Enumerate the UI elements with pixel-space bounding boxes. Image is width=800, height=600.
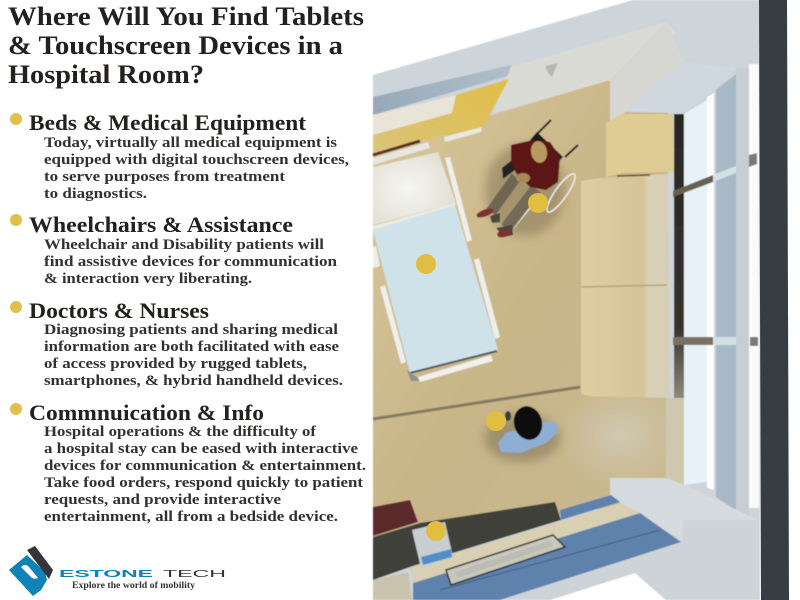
- body text: [44, 424, 366, 525]
- yellow wall panel: [373, 79, 509, 152]
- headboard wall strip: [373, 95, 457, 135]
- bullet: [10, 214, 22, 226]
- body text: [44, 237, 338, 287]
- window outer white: [749, 64, 759, 508]
- body text: a hospital stay can be eased with interactive: [44, 441, 358, 457]
- marker: nurse: [486, 411, 506, 431]
- window pale glass: [684, 100, 707, 485]
- window column: [736, 68, 749, 518]
- body text: to serve purposes from treatment: [44, 169, 285, 185]
- title: [8, 2, 364, 89]
- grey floor sheen near the window: [558, 385, 682, 485]
- body text: find assistive devices for communication: [44, 254, 338, 270]
- body text: [44, 322, 343, 389]
- body text: requests, and provide interactive: [44, 492, 281, 508]
- sofa: [581, 174, 670, 398]
- wordmark: TECH: [163, 569, 226, 580]
- body text: & interaction very liberating.: [44, 271, 252, 287]
- window soffit: [626, 62, 736, 113]
- wall below window frame: [666, 398, 684, 485]
- heading: Doctors & Nurses: [29, 298, 209, 323]
- section: doctors and nurses: [10, 298, 343, 389]
- heading: Beds & Medical Equipment: [29, 110, 307, 135]
- body text: smartphones, & hybrid handheld devices.: [44, 373, 343, 389]
- blue-grey wall stripe: [373, 65, 511, 115]
- tagline: Explore the world of mobility: [72, 581, 195, 591]
- body text: entertainment, all from a bedside device.: [44, 509, 338, 525]
- ceiling soffit: [493, 22, 676, 113]
- marker: wheelchair: [528, 193, 548, 213]
- dark structural column: [759, 0, 789, 600]
- panel: hospital room illustration: [373, 0, 789, 600]
- window blue glass: [716, 74, 736, 510]
- logo: Estone Tech: [9, 546, 226, 596]
- dark headboard edge: [373, 141, 420, 155]
- window white strip: [707, 93, 714, 490]
- dark desk: [373, 502, 561, 580]
- bullet: [10, 301, 22, 313]
- body text: Take food orders, respond quickly to patient: [44, 475, 363, 491]
- marker: bed: [416, 254, 436, 274]
- section: wheelchairs and assistance: [10, 212, 338, 287]
- body text: Diagnosing patients and sharing medical: [44, 322, 338, 338]
- soffit corner: [610, 22, 683, 122]
- wheelchair patient: [475, 120, 579, 239]
- floor: [373, 80, 668, 545]
- logo mark: [9, 546, 53, 596]
- body text: to diagnostics.: [44, 186, 147, 202]
- section: beds and medical equipment: [10, 110, 349, 202]
- body text: information are both facilitated with ease: [44, 339, 339, 355]
- grey cabinet: [373, 572, 412, 600]
- body text: equipped with digital touchscreen devices,: [44, 152, 349, 168]
- window sill: [610, 478, 758, 541]
- visitor chair: [373, 500, 418, 536]
- title: & Touchscreen Devices in a: [8, 31, 343, 60]
- wordmark: ESTONE: [59, 569, 154, 580]
- counter: [410, 503, 640, 583]
- bullet: [10, 403, 22, 415]
- heading: Wheelchairs & Assistance: [29, 212, 293, 237]
- tablet device on desk: [412, 522, 453, 568]
- ceiling light fixture: [545, 63, 558, 77]
- lower mullion: [673, 337, 713, 345]
- body text: Wheelchair and Disability patients will: [44, 237, 324, 253]
- upper mullion: [673, 175, 713, 197]
- wall base: [373, 0, 760, 600]
- body text: devices for communication & entertainment.: [44, 458, 366, 474]
- keyboard tray: [446, 535, 565, 585]
- blue floor at door: [560, 495, 620, 520]
- side table cube: [606, 114, 674, 177]
- body text: [44, 135, 349, 202]
- wordmark: [59, 569, 226, 580]
- bullet: [10, 113, 22, 125]
- heading: Commnuication & Info: [29, 400, 264, 425]
- title: Hospital Room?: [8, 60, 204, 89]
- standing nurse: [484, 403, 560, 462]
- body text: Hospital operations & the difficulty of: [44, 424, 317, 440]
- bottom wall: [497, 520, 760, 600]
- window dark frame: [674, 114, 684, 398]
- white ledge: [444, 127, 482, 142]
- bed: [373, 142, 500, 382]
- section: communication and info: [10, 400, 366, 525]
- title: Where Will You Find Tablets: [8, 2, 364, 31]
- floor seam: [373, 387, 580, 419]
- body text: of access provided by rugged tablets,: [44, 356, 307, 372]
- body text: Today, virtually all medical equipment is: [44, 135, 337, 151]
- marker: bedside device: [426, 521, 446, 541]
